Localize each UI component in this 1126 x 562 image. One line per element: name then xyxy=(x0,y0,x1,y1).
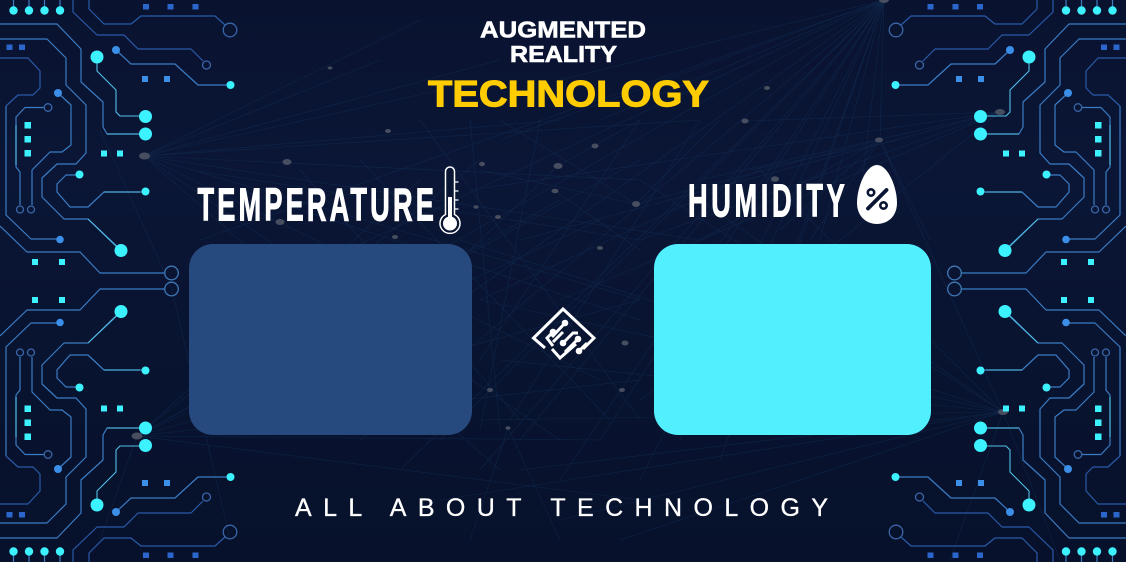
heading: humidity: HUMIDITY xyxy=(688,176,848,227)
title line: augmented: AUGMENTED xyxy=(480,16,646,42)
circuit: bottom right xyxy=(889,282,1126,562)
circuit: bottom left xyxy=(0,282,237,562)
icon: thermometer xyxy=(440,167,460,233)
network nodes xyxy=(132,0,1008,440)
heading: temperature: TEMPERATURE xyxy=(198,180,437,231)
circuit: top right xyxy=(889,0,1126,280)
panel: humidity xyxy=(654,244,931,435)
panel: temperature xyxy=(189,244,472,435)
title xyxy=(428,16,709,114)
icon: circuit chip logo xyxy=(534,309,594,358)
icon: humidity drop xyxy=(857,165,897,224)
title line: reality: REALITY xyxy=(510,41,617,67)
title line: technology: TECHNOLOGY xyxy=(428,74,709,114)
footer text: ALL ABOUT TECHNOLOGY xyxy=(295,494,828,522)
circuit: top left xyxy=(0,0,237,280)
